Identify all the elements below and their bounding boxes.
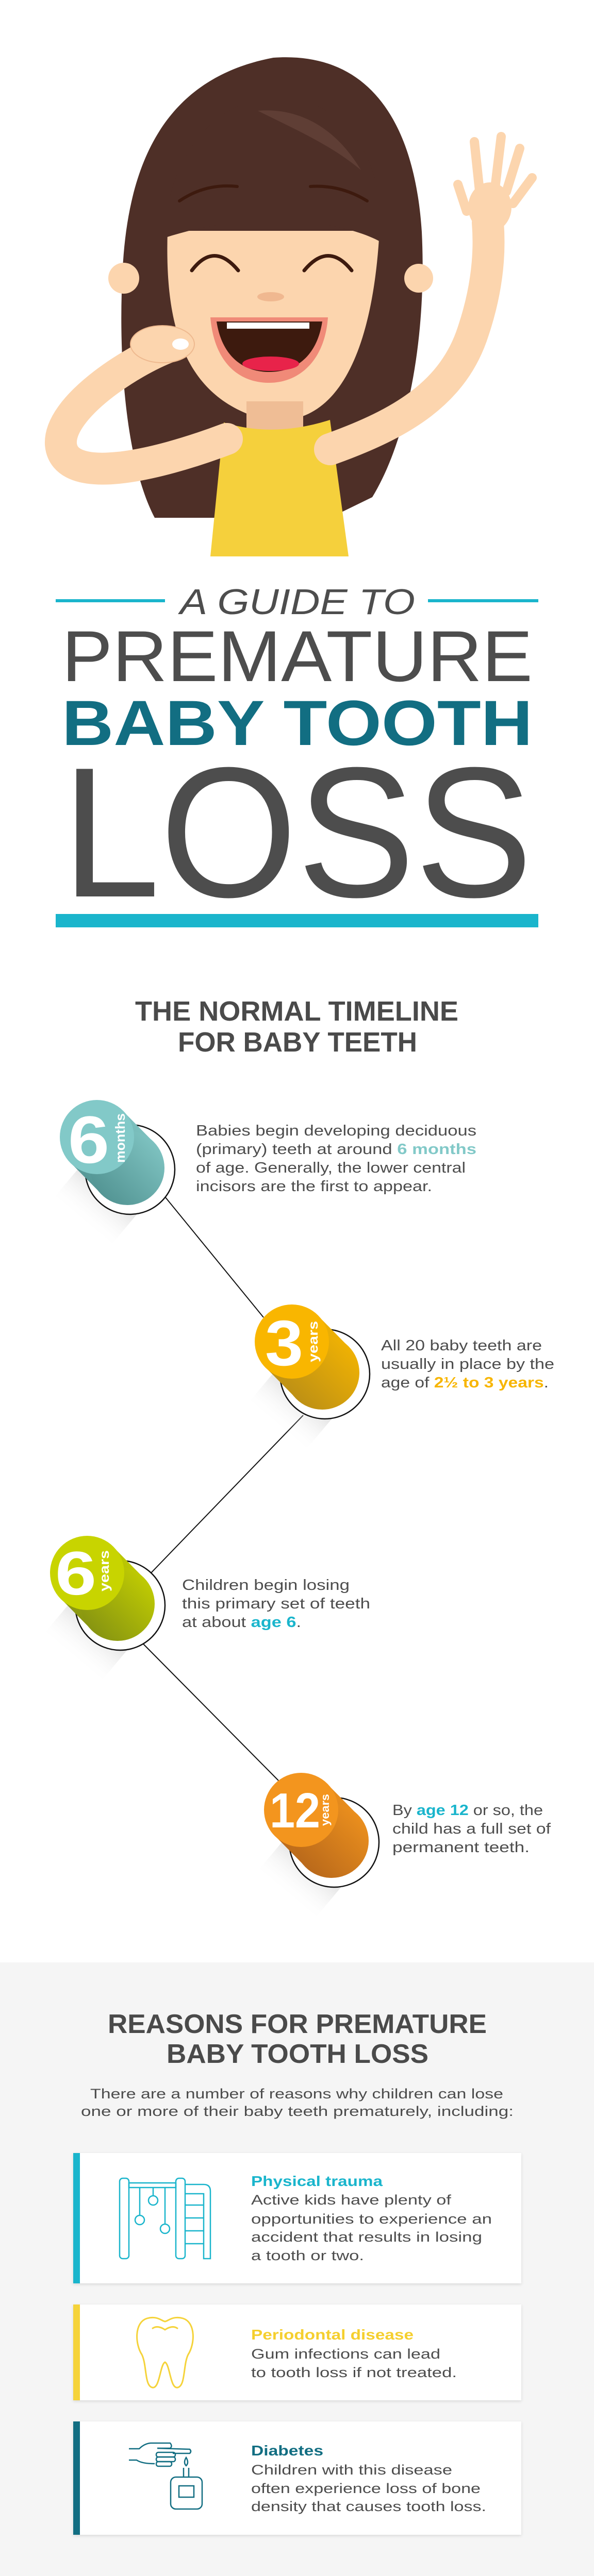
heading: reasons: BABY TOOTH LOSS (167, 2039, 428, 2069)
heading: normal timeline (135, 996, 458, 1058)
heading: reasons: REASONS FOR PREMATURE (108, 2009, 487, 2039)
text: 3 years: All 20 baby teeth are (381, 1337, 542, 1354)
timeline marker: 6 months: 6 (68, 1102, 109, 1177)
intro text (81, 2086, 514, 2119)
timeline marker: 6 months: months (112, 1113, 128, 1163)
card: physical trauma: a tooth or two. (251, 2248, 364, 2263)
card: physical trauma: Physical trauma (251, 2173, 383, 2189)
timeline marker: 12 years (257, 1773, 379, 1920)
icon: hand and glucose meter (129, 2443, 202, 2509)
timeline marker: 6 years (43, 1536, 165, 1683)
card: periodontal disease: Periodontal disease (251, 2327, 414, 2343)
card: periodontal disease: to tooth loss if not treated. (251, 2365, 457, 2380)
text: 6 months: Babies begin developing deciduous (196, 1123, 476, 1139)
heading: normal timeline: FOR BABY TEETH (178, 1027, 417, 1058)
card: physical trauma: accident that results in losing (251, 2229, 482, 2245)
timeline marker: 3 years: years (305, 1321, 321, 1362)
text: 6 years: Children begin losing (182, 1577, 350, 1594)
text: 6 years (182, 1577, 370, 1631)
timeline marker: 6 years: years (96, 1550, 112, 1591)
timeline marker: 6 months (53, 1100, 175, 1247)
text: 6 years: this primary set of teeth (182, 1596, 370, 1612)
card: periodontal disease (73, 2304, 521, 2400)
text: 3 years: usually in place by the (381, 1356, 554, 1372)
text: 6 months: (primary) teeth at around 6 months (196, 1141, 476, 1158)
timeline marker: 6 years: 6 (55, 1539, 96, 1608)
card: periodontal disease: Gum infections can lead (251, 2346, 440, 2362)
title: A GUIDE TO (177, 582, 415, 622)
illustration: girl holding lost tooth (61, 57, 532, 556)
card: physical trauma: Active kids have plenty of (251, 2192, 452, 2208)
text: 12 years (392, 1802, 551, 1856)
card: physical trauma (73, 2153, 521, 2283)
heading: normal timeline: THE NORMAL TIMELINE (135, 996, 458, 1027)
text: 12 years: child has a full set of (392, 1821, 551, 1837)
text: 6 months: incisors are the first to appear. (196, 1178, 432, 1195)
title: BABY TOOTH (62, 688, 533, 759)
title: PREMATURE (62, 616, 533, 697)
card: diabetes: density that causes tooth loss. (251, 2499, 486, 2514)
card: physical trauma: opportunities to experience an (251, 2211, 492, 2227)
intro text: one or more of their baby teeth prematurely, including: (81, 2104, 514, 2119)
card: diabetes: Children with this disease (251, 2462, 452, 2478)
text: 12 years: permanent teeth. (392, 1839, 530, 1856)
text: 6 years: at about age 6 . (182, 1614, 301, 1631)
panel: reasons for premature baby tooth loss (0, 1962, 594, 2576)
card: diabetes (73, 2421, 521, 2535)
text: 6 months: of age. Generally, the lower central (196, 1160, 466, 1176)
timeline marker: 3 years: 3 (265, 1308, 303, 1379)
timeline marker: 12 years: 12 (270, 1783, 320, 1838)
timeline marker: 12 years: years (319, 1794, 332, 1826)
text: 12 years: By age 12 or so, the (392, 1802, 543, 1819)
intro text: There are a number of reasons why children can lose (90, 2086, 503, 2102)
title (56, 582, 538, 936)
card: diabetes: Diabetes (251, 2443, 323, 2459)
text: 3 years: age of 2½ to 3 years . (381, 1375, 549, 1391)
timeline marker: 3 years (248, 1304, 370, 1452)
card: diabetes: often experience loss of bone (251, 2481, 481, 2496)
text: 6 months (196, 1123, 476, 1195)
text: 3 years (381, 1337, 554, 1391)
timeline connector lines (142, 1197, 303, 1781)
icon: tooth (137, 2317, 193, 2387)
icon: playground (120, 2178, 210, 2259)
heading: reasons (108, 2009, 487, 2069)
title: LOSS (62, 729, 533, 936)
